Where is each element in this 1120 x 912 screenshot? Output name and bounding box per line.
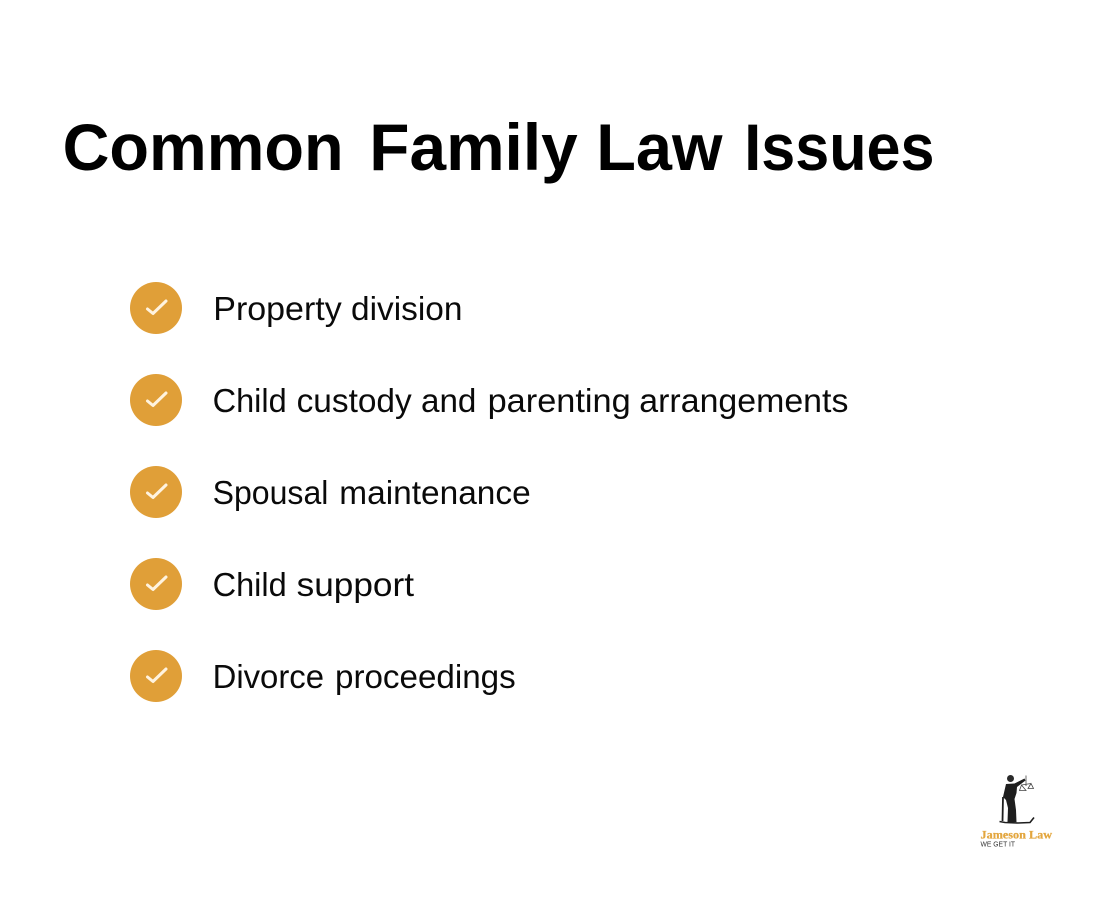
logo: Jameson Law [980, 775, 1053, 848]
icon: lady justice with scales and letter L [1000, 775, 1034, 823]
item: property division [130, 282, 462, 334]
logo name: Jameson Law [980, 829, 1053, 841]
title: Issues [744, 110, 934, 184]
item: property division: division [351, 290, 462, 327]
title: Common [63, 110, 344, 184]
title: Law [596, 110, 723, 184]
item: child custody and parenting arrangements: arrangements [639, 382, 848, 419]
item: divorce proceedings: proceedings [335, 658, 516, 695]
item: child custody and parenting arrangements [130, 374, 848, 426]
item: property division: Property [213, 290, 342, 327]
checklist [130, 282, 848, 702]
item: divorce proceedings [130, 650, 516, 702]
title: Family [369, 110, 578, 184]
item: spousal maintenance: Spousal [213, 474, 328, 511]
item: child custody and parenting arrangements: parenting [488, 382, 631, 419]
item: child support: support [297, 566, 414, 603]
title [63, 110, 935, 184]
item: spousal maintenance [130, 466, 531, 518]
item: divorce proceedings: Divorce [213, 658, 324, 695]
item: child custody and parenting arrangements: and [421, 382, 476, 419]
item: child support: Child [213, 566, 287, 603]
item: child support [130, 558, 414, 610]
item: child custody and parenting arrangements: Child [213, 382, 287, 419]
item: child custody and parenting arrangements: custody [297, 382, 412, 419]
logo tagline: WE GET IT [980, 839, 1015, 848]
item: spousal maintenance: maintenance [339, 474, 531, 511]
